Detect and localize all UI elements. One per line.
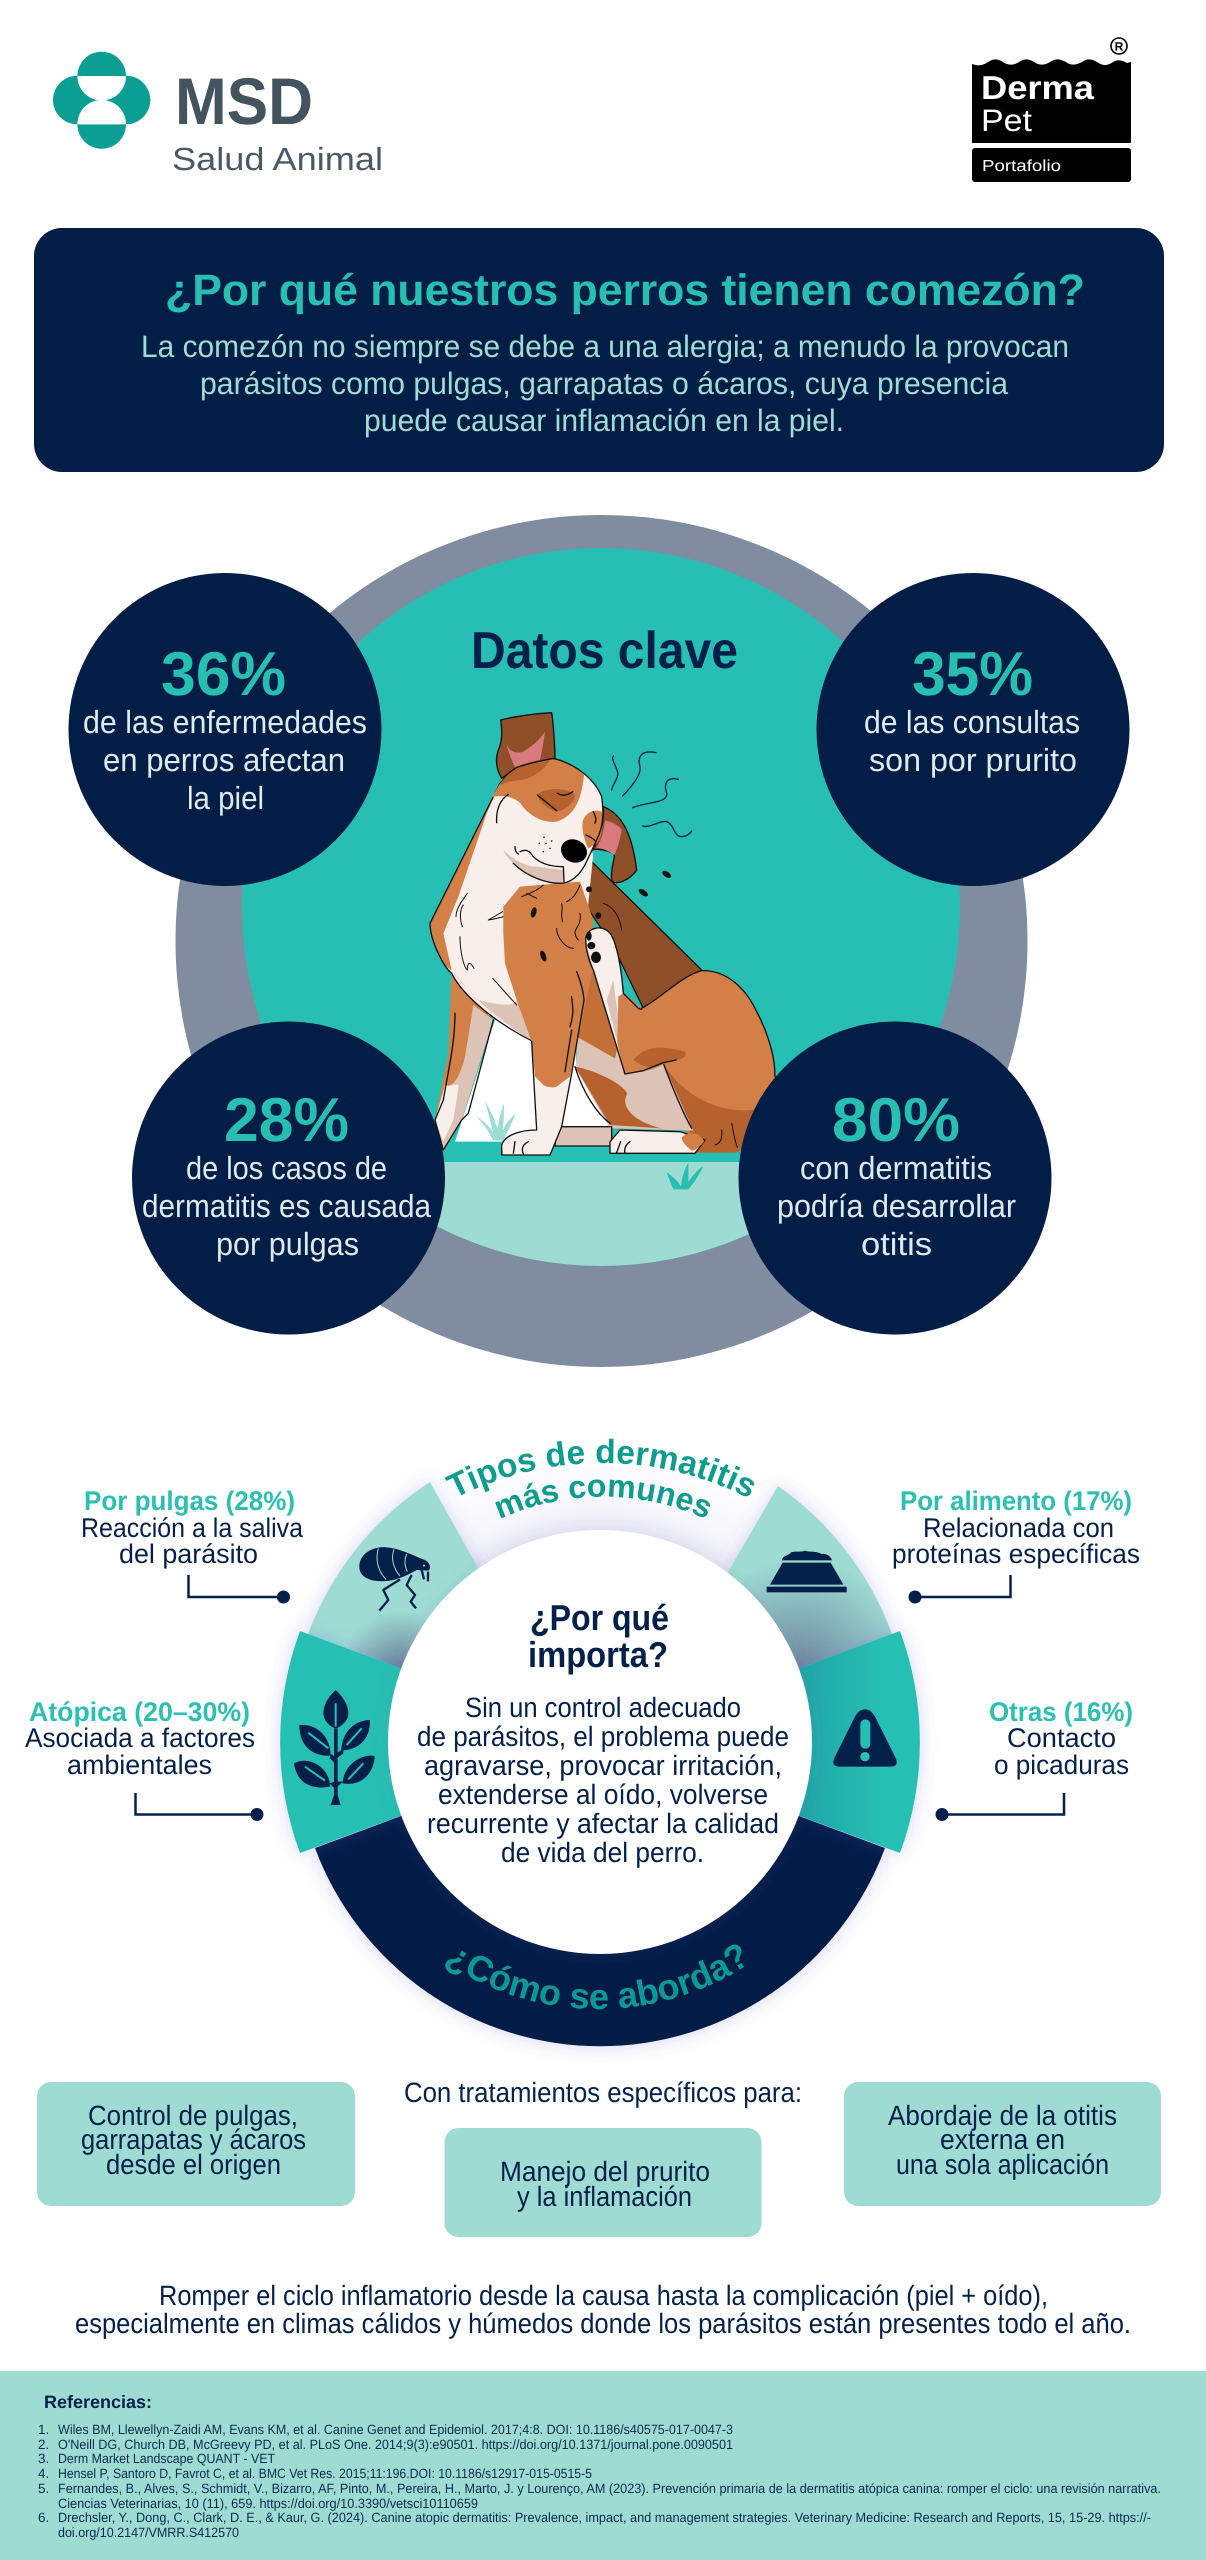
dog fur details and fleas xyxy=(522,869,672,962)
center text: por que importa xyxy=(417,1597,789,1868)
stat: 28%: de los casos de xyxy=(186,1150,387,1186)
center text: por que importa: de vida del perro. xyxy=(501,1837,704,1868)
callout: por pulgas: Reacción a la saliva xyxy=(81,1513,304,1543)
callout: otras: Otras (16%) xyxy=(989,1697,1133,1727)
segment: atopica xyxy=(280,1631,600,1853)
stat: 28%: 28% xyxy=(224,1086,349,1155)
center text: por que importa: importa? xyxy=(528,1634,668,1675)
dog right ear xyxy=(592,807,637,883)
heading: datos clave: Datos clave xyxy=(471,622,738,680)
callout: por pulgas: del parásito xyxy=(119,1539,258,1569)
callout: por alimento xyxy=(892,1486,1140,1604)
dog hind paw xyxy=(610,1130,705,1153)
dog hind thigh xyxy=(642,971,775,1153)
stat: 36%: en perros afectan xyxy=(103,742,345,778)
box: manejo del prurito: Manejo del prurito xyxy=(500,2156,710,2187)
box: abordaje de la otitis: externa en xyxy=(940,2124,1065,2155)
center text: por que importa: agravarse, provocar irritación, xyxy=(424,1750,782,1781)
treatment intro: Con tratamientos específicos para: xyxy=(404,2077,802,2108)
box: control de pulgas: desde el origen xyxy=(106,2149,281,2180)
panel: referencias: 3. xyxy=(38,2451,49,2466)
stat: 35%: son por prurito xyxy=(869,742,1077,778)
stat: 35%: de las consultas xyxy=(864,704,1080,740)
icon: flea xyxy=(359,1547,430,1611)
stat: 28%: por pulgas xyxy=(216,1226,359,1262)
intro text: parásitos como pulgas, garrapatas o ácaros, cuya presencia xyxy=(200,366,1009,401)
DermaPet Portafolio logo xyxy=(972,38,1131,182)
callout: por pulgas: Por pulgas (28%) xyxy=(84,1486,295,1516)
closing statement: Romper el ciclo inflamatorio desde la causa hasta la complicación (piel + oído), xyxy=(159,2280,1048,2311)
panel: referencias: Fernandes, B., Alves, S., Schmidt, V., Bizarro, AF, Pinto, M., Pereira, H., Marto, J. y Lourenço, AM (2023). Prevención primaria de la dermatitis atópica canina: romper el ciclo: una revisión narrativa. xyxy=(58,2481,1161,2496)
center text: por que importa: de parásitos, el problema puede xyxy=(417,1721,789,1752)
panel: referencias: 4. xyxy=(38,2466,49,2481)
MSD logo: MSD xyxy=(175,64,313,138)
dog raised hind leg xyxy=(585,928,711,1074)
center text: por que importa: Sin un control adecuado xyxy=(465,1692,741,1723)
dog far leg xyxy=(435,970,493,1150)
panel: referencias: 2. xyxy=(38,2437,49,2452)
box: control de pulgas: garrapatas y ácaros xyxy=(81,2124,306,2155)
icon: grass right xyxy=(667,1163,703,1189)
segment: por pulgas xyxy=(308,1482,600,1742)
panel: referencias: 1. xyxy=(38,2422,49,2437)
icon: warning xyxy=(833,1709,897,1767)
stat: 28% xyxy=(132,1022,445,1334)
stat: 80%: con dermatitis xyxy=(800,1150,992,1186)
intro text xyxy=(141,329,1069,438)
dog front leg xyxy=(502,882,593,1155)
MSD logo: Salud Animal xyxy=(172,141,383,177)
DermaPet Portafolio logo: Derma xyxy=(981,69,1095,106)
icon: food bowl xyxy=(767,1551,847,1592)
box: abordaje de la otitis xyxy=(844,2082,1161,2206)
callout: por alimento: proteínas específicas xyxy=(892,1539,1140,1569)
closing statement xyxy=(75,2280,1131,2339)
segment: como se aborda xyxy=(315,1742,885,2046)
intro text: puede causar inflamación en la piel. xyxy=(364,403,844,438)
callout: otras: Contacto xyxy=(1007,1723,1116,1753)
top wedge xyxy=(430,1428,778,1742)
stat: 35%: 35% xyxy=(912,640,1033,709)
diagram: dermatitis ring xyxy=(280,1428,920,2046)
panel: referencias: 5. xyxy=(38,2481,49,2496)
stat: 36% xyxy=(68,573,382,886)
itch squiggles xyxy=(612,752,692,837)
DermaPet Portafolio logo: Portafolio xyxy=(982,158,1061,175)
curved heading: como se aborda: ¿Cómo se aborda? xyxy=(445,1944,744,2010)
center text: por que importa: recurrente y afectar la calidad xyxy=(427,1808,779,1839)
callout: otras: o picaduras xyxy=(994,1750,1129,1780)
DermaPet Portafolio logo: Pet xyxy=(981,103,1032,138)
illustration: dog scratching xyxy=(430,713,775,1189)
callout: atopica: Asociada a factores xyxy=(25,1723,255,1753)
stat: 80%: otitis xyxy=(861,1226,932,1262)
dog back xyxy=(580,860,702,1008)
stat: 80%: 80% xyxy=(832,1086,960,1155)
box: abordaje de la otitis: Abordaje de la otitis xyxy=(888,2100,1117,2131)
panel: referencias: Derm Market Landscape QUANT - VET xyxy=(58,2451,275,2466)
stat: 36%: de las enfermedades xyxy=(83,704,367,740)
panel: referencias: Ciencias Veterinarias, 10 (11), 659. https://doi.org/10.3390/vetsci10110659 xyxy=(58,2496,478,2511)
box: manejo del prurito xyxy=(444,2128,762,2237)
panel: referencias: O'Neill DG, Church DB, McGreevy PD, et al. PLoS One. 2014;9(3):e90501. https://doi.org/10.1371/journal.pone.0090501 xyxy=(58,2437,733,2452)
box: abordaje de la otitis: una sola aplicación xyxy=(896,2149,1109,2180)
shading xyxy=(308,1482,600,1742)
dog chest xyxy=(430,783,593,1042)
callout: por pulgas xyxy=(81,1486,304,1604)
curved heading: tipos de dermatitis: Tipos de dermatitis xyxy=(444,1438,754,1496)
stat: 80% xyxy=(738,1022,1052,1334)
panel: referencias xyxy=(0,2371,1206,2560)
stat: 36%: 36% xyxy=(161,640,286,709)
title: ¿Por qué nuestros perros tienen comezón? xyxy=(165,266,1085,315)
panel: referencias: 6. xyxy=(38,2510,49,2525)
dog top ear xyxy=(497,713,555,785)
icon: grass left xyxy=(476,1100,516,1141)
box: control de pulgas: Control de pulgas, xyxy=(88,2100,298,2131)
dog head xyxy=(490,758,603,883)
callout: atopica xyxy=(25,1697,264,1821)
stat: 35% xyxy=(816,573,1130,886)
panel: referencias: Referencias: xyxy=(44,2392,152,2412)
stat: 80%: podría desarrollar xyxy=(777,1188,1016,1224)
DermaPet Portafolio logo: R xyxy=(1115,40,1124,54)
title banner xyxy=(34,228,1164,472)
callout: atopica: ambientales xyxy=(67,1750,212,1780)
callout: por alimento: Relacionada con xyxy=(923,1513,1114,1543)
box: control de pulgas xyxy=(37,2082,355,2206)
stat: 36%: la piel xyxy=(187,780,264,816)
center text: por que importa: ¿Por qué xyxy=(530,1597,669,1638)
callout: por alimento: Por alimento (17%) xyxy=(900,1486,1132,1516)
segment: otras xyxy=(600,1631,920,1853)
curved heading: tipos de dermatitis: más comunes xyxy=(495,1480,710,1518)
callout: otras xyxy=(936,1697,1133,1821)
panel: referencias: doi.org/10.2147/VMRR.S412570 xyxy=(58,2525,239,2540)
panel: referencias: Drechsler, Y., Dong, C., Clark, D. E., & Kaur, G. (2024). Canine atopic dermatitis: Prevalence, impact, and management strategies. Veterinary Medicine: Research and Reports, 15, 15-29. https://- xyxy=(58,2510,1151,2525)
panel: referencias: Wiles BM, Llewellyn-Zaidi AM, Evans KM, et al. Canine Genet and Epidemiol. 2017;4:8. DOI: 10.1186/s40575-017-0047-3 xyxy=(58,2422,733,2437)
dog belly xyxy=(555,970,693,1146)
intro text: La comezón no siempre se debe a una alergia; a menudo la provocan xyxy=(141,329,1069,364)
icon: plant xyxy=(294,1690,375,1805)
center circle xyxy=(388,1530,812,1954)
segment: por alimento xyxy=(600,1486,892,1742)
stat: 28%: dermatitis es causada xyxy=(142,1188,431,1224)
MSD logo xyxy=(53,52,383,177)
panel: datos clave circle xyxy=(176,515,1028,1367)
panel: referencias: Hensel P, Santoro D, Favrot C, et al. BMC Vet Res. 2015;11:196.DOI: 10.1186/s12917-015-0515-5 xyxy=(58,2466,592,2481)
closing statement: especialmente en climas cálidos y húmedos donde los parásitos están presentes todo el año. xyxy=(75,2308,1131,2339)
callout: atopica: Atópica (20–30%) xyxy=(29,1697,250,1727)
center text: por que importa: extenderse al oído, volverse xyxy=(438,1779,768,1810)
box: manejo del prurito: y la inflamación xyxy=(517,2181,692,2212)
